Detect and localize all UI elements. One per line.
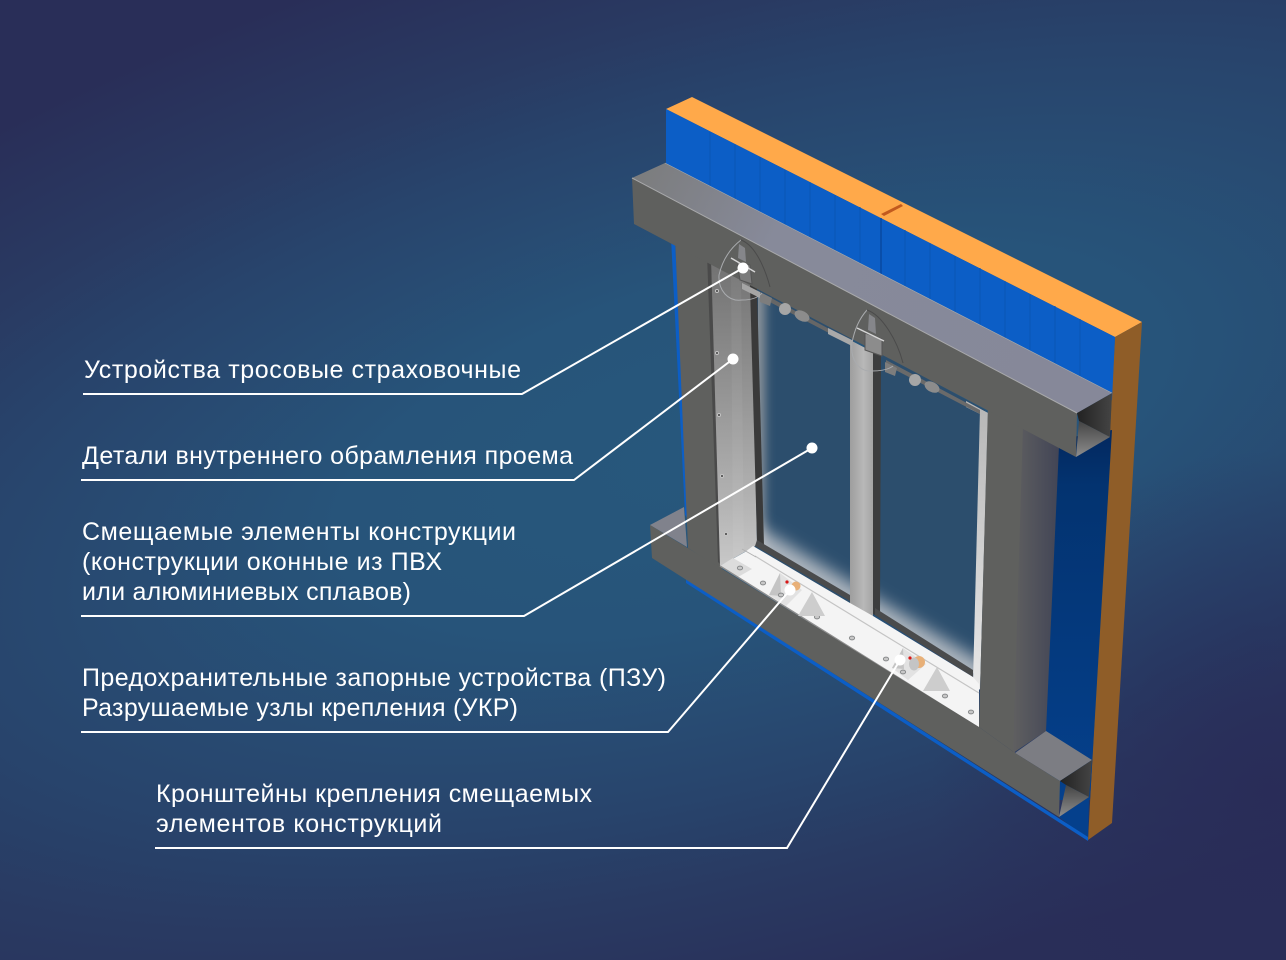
bracket 1 bbox=[769, 573, 802, 606]
label 3: или алюминиевых сплавов) bbox=[82, 578, 411, 606]
label 5: элементов конструкций bbox=[156, 810, 442, 838]
left frame dark edge bbox=[707, 254, 722, 566]
panel seams bbox=[710, 132, 1080, 376]
glass frosting bbox=[758, 297, 850, 595]
beam end opening upper bbox=[1077, 393, 1112, 437]
label 3: (конструкции оконные из ПВХ bbox=[82, 548, 442, 576]
safety locks bbox=[792, 582, 800, 590]
sill bbox=[720, 546, 979, 728]
panel orange side edge bbox=[1088, 322, 1142, 840]
panes: glass bbox=[755, 289, 985, 674]
sill screws bbox=[737, 566, 974, 714]
leader dots bbox=[728, 262, 906, 666]
safety cable device 1 bbox=[719, 240, 770, 300]
frame top strip right bbox=[966, 401, 988, 414]
wall panel: insulated sandwich panel bbox=[666, 97, 1142, 841]
panel orange top edge bbox=[666, 97, 1142, 337]
top beam bbox=[632, 163, 1112, 457]
leader 4 bbox=[81, 590, 790, 732]
bottom beam opening lower bbox=[1059, 785, 1089, 817]
label 5: Кронштейны крепления смещаемых bbox=[156, 780, 592, 808]
panel blue upper face bbox=[666, 109, 1115, 400]
bottom beam opening upper bbox=[1060, 760, 1092, 797]
label 1: Устройства тросовые страховочные bbox=[84, 356, 521, 384]
panel blue lower corner bbox=[1059, 797, 1089, 840]
dark glazing bead left bbox=[750, 285, 764, 546]
window assembly bbox=[707, 254, 1000, 728]
dark glazing bead mullion bbox=[873, 352, 881, 618]
bracket screws bbox=[778, 593, 784, 597]
leader 5 bbox=[155, 660, 900, 848]
label 4 bbox=[82, 664, 666, 722]
bottom beam front face bbox=[650, 525, 1060, 817]
bottom beam right top face bbox=[1015, 731, 1092, 781]
bracket 4 bbox=[923, 667, 950, 691]
leader 2 bbox=[81, 359, 733, 480]
label 2: Детали внутреннего обрамления проема bbox=[82, 442, 573, 470]
orange joint mark bbox=[881, 204, 903, 216]
bracket 3 bbox=[892, 648, 926, 680]
left frame bolts bbox=[716, 290, 728, 536]
left pillar bbox=[675, 236, 722, 570]
left frame ridges bbox=[731, 275, 744, 558]
bracket 2 bbox=[798, 592, 825, 616]
right pillar bbox=[979, 405, 1059, 753]
leader 1 bbox=[83, 268, 743, 394]
label 3: Смещаемые элементы конструкции bbox=[82, 518, 516, 546]
label 3 bbox=[82, 518, 516, 606]
leader 3 bbox=[81, 448, 812, 616]
label 4: Предохранительные запорные устройства (ПЗУ) bbox=[82, 664, 666, 692]
beam front face bbox=[632, 178, 1077, 457]
beam top face bbox=[632, 163, 1112, 413]
hardware rail under beam bbox=[742, 283, 980, 414]
bottom beam left end bbox=[650, 507, 687, 547]
leader lines bbox=[81, 268, 900, 848]
bottom dark bead bbox=[755, 540, 850, 601]
right frame strip bbox=[973, 409, 988, 690]
mullion bbox=[850, 340, 873, 618]
label 5 bbox=[156, 780, 592, 838]
safety cable device 2 bbox=[852, 310, 903, 371]
beam end opening lower bbox=[1076, 421, 1110, 457]
left frame bbox=[711, 257, 757, 566]
label 4: Разрушаемые узлы крепления (УКР) bbox=[82, 694, 518, 722]
blue left edge bbox=[671, 238, 689, 520]
bottom beam bbox=[650, 507, 1092, 817]
panel blue lower face bbox=[1046, 430, 1112, 800]
blue bottom edge bbox=[686, 579, 1088, 841]
